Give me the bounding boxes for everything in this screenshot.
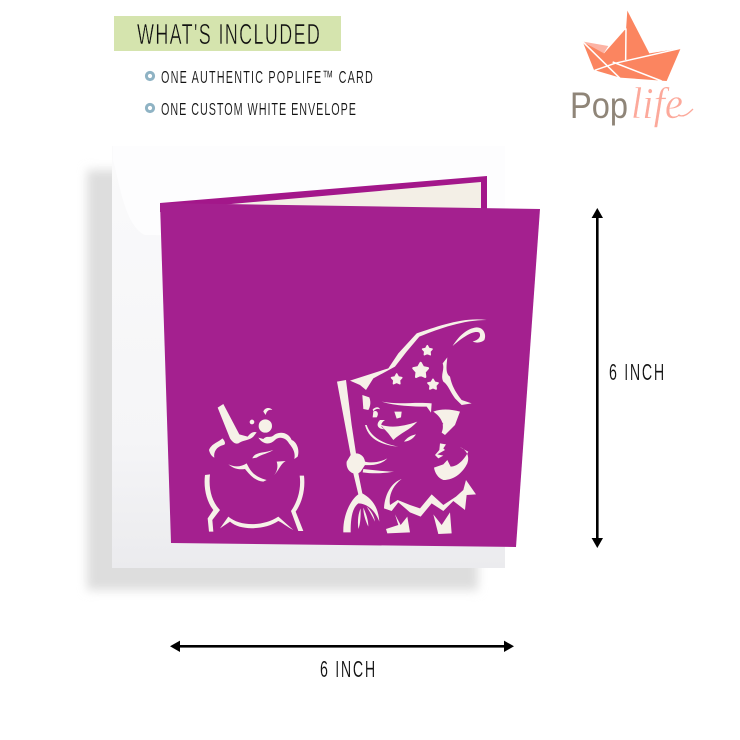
envelope shadow bbox=[87, 170, 478, 590]
heading: what's included: WHAT'S INCLUDED bbox=[137, 19, 320, 51]
logo: poplife paper boat: Pop bbox=[570, 85, 628, 126]
label: width 6 inch: 6 INCH bbox=[320, 658, 375, 683]
arrow: height dimension bbox=[592, 208, 603, 548]
card back panel bbox=[160, 176, 487, 212]
logo: poplife paper boat: life bbox=[631, 79, 683, 128]
envelope bbox=[112, 146, 505, 568]
list item: envelope: ONE CUSTOM WHITE ENVELOPE bbox=[161, 100, 356, 120]
arrow: width dimension bbox=[170, 641, 514, 652]
cut-out: witch hat and face bbox=[350, 319, 487, 435]
label: height 6 inch: 6 INCH bbox=[609, 361, 664, 386]
cut-out: witch body and broom bbox=[337, 380, 476, 534]
cut-out: cauldron bbox=[205, 404, 304, 532]
logo: poplife paper boat bbox=[570, 11, 693, 128]
card front panel bbox=[160, 203, 540, 547]
list item: poplife card: ONE AUTHENTIC POPLIFE™ CARD bbox=[161, 68, 373, 88]
